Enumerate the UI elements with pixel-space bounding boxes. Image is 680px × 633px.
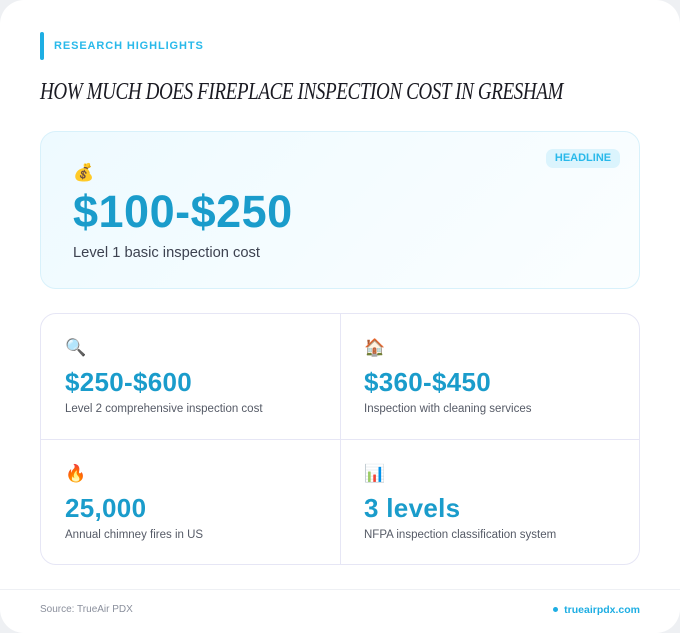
accent bar [40,32,44,60]
icon: magnifier: 🔍 [65,338,86,358]
stat: cleaning: Inspection with cleaning services [364,403,531,415]
icon: house: 🏠 [364,338,385,358]
icon: money bag: 💰 [73,163,94,183]
headline value: $100-$250 [73,186,293,237]
stat: cleaning: $360-$450 [364,367,491,397]
stat: levels: NFPA inspection classification system [364,529,556,541]
title: HOW MUCH DOES FIREPLACE INSPECTION COST IN GRESHAM [40,79,563,105]
stat: chimney fires [65,464,203,541]
stat: levels [364,464,556,541]
footer: source: Source: TrueAir PDX [40,604,133,615]
footer: link: trueairpdx.com [564,604,640,616]
label: research highlights: RESEARCH HIGHLIGHTS [54,40,204,52]
panel: headline [40,131,640,289]
stat: chimney fires: Annual chimney fires in US [65,529,203,541]
headline description: Level 1 basic inspection cost [73,245,260,261]
stat: chimney fires: 25,000 [65,493,146,523]
stat: cleaning [364,338,532,415]
badge: headline [546,149,620,168]
icon: fire: 🔥 [65,464,86,484]
stat: level 2 [65,338,263,415]
stat: level 2: Level 2 comprehensive inspection cost [65,403,263,415]
stat: level 2: $250-$600 [65,367,192,397]
panel: stats grid [40,313,640,565]
icon: chart: 📊 [364,464,385,484]
stat: levels: 3 levels [364,493,460,523]
badge: headline: HEADLINE [555,152,611,164]
